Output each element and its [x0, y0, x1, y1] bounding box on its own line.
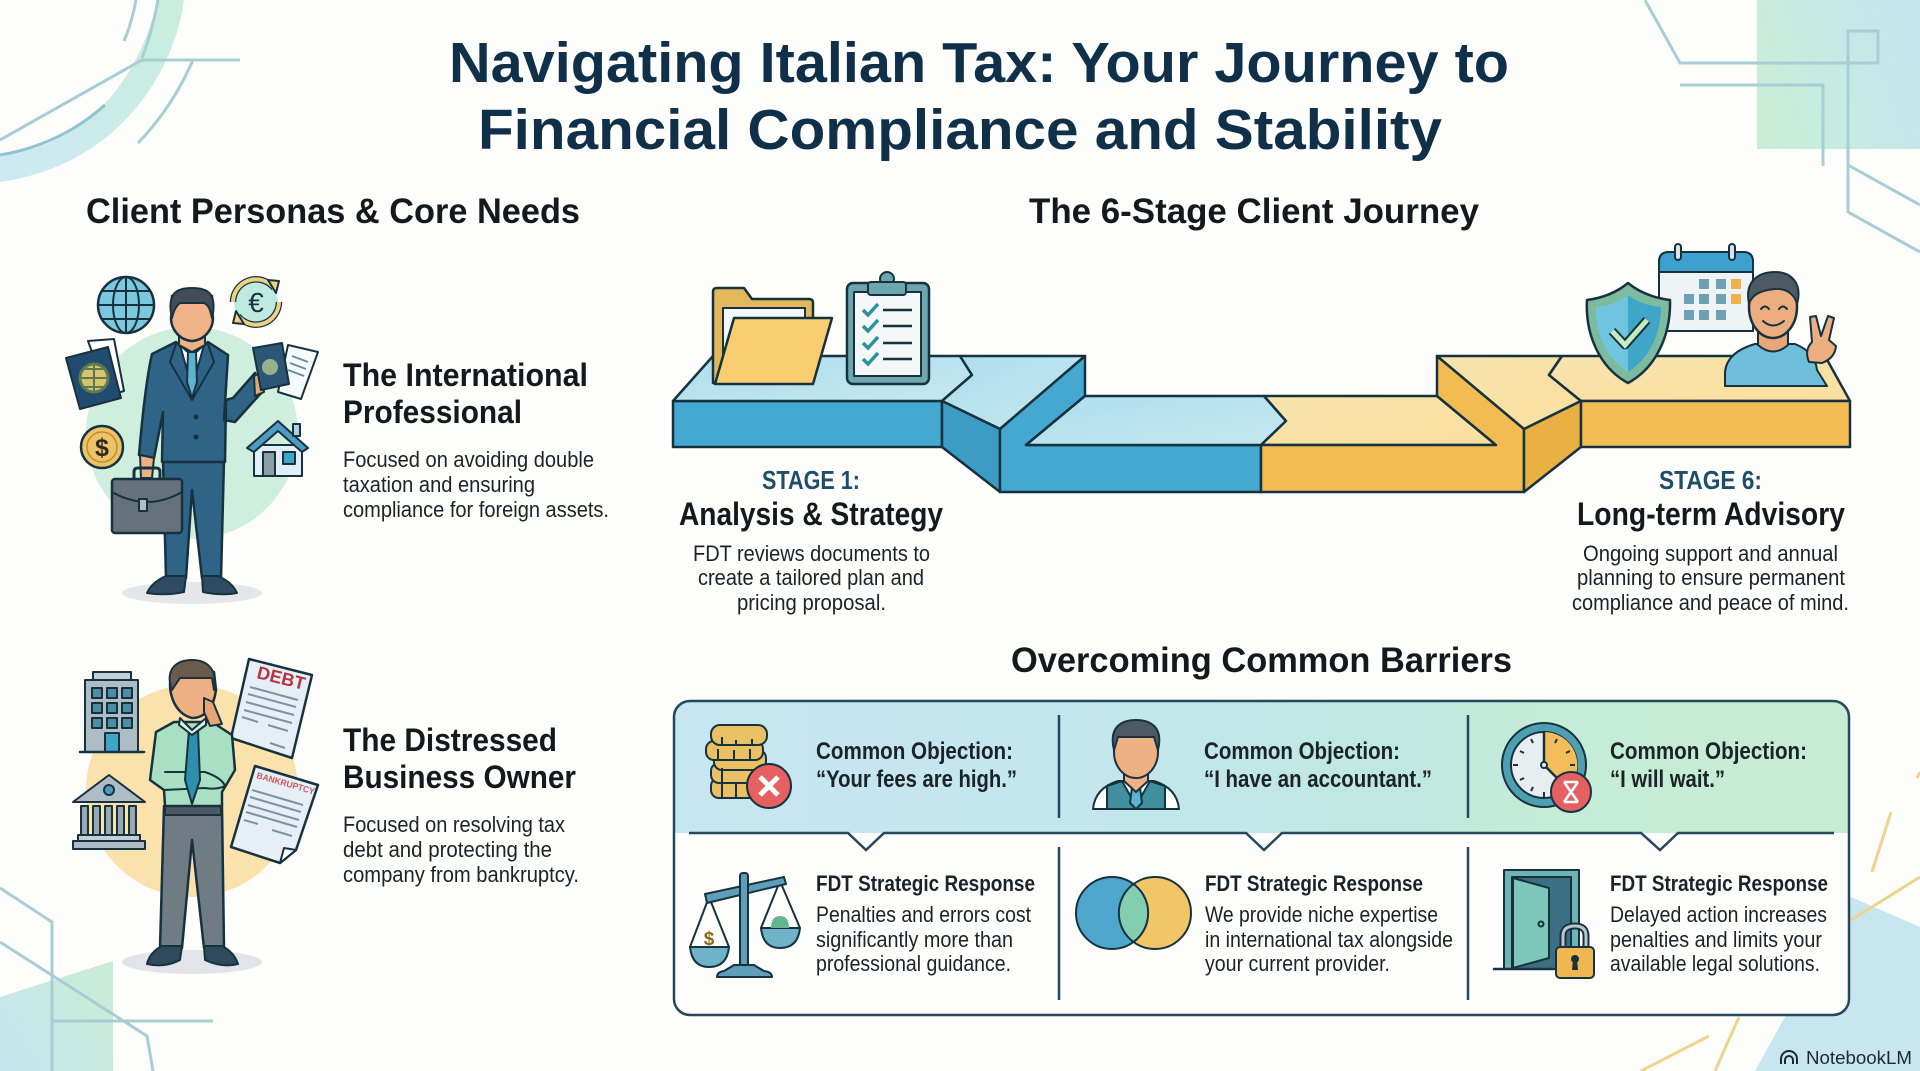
watermark: NotebookLM: NotebookLM — [1806, 1048, 1912, 1068]
objection text: “I will wait.” — [1610, 766, 1725, 793]
response text: We provide niche expertise — [1205, 902, 1438, 927]
icon: globe — [98, 277, 154, 333]
icon: happy client — [1725, 272, 1836, 386]
persona: international professional — [66, 277, 609, 604]
response text: Penalties and errors cost — [816, 902, 1031, 927]
objection text: Common Objection: — [1204, 738, 1400, 765]
objection 2 — [1093, 720, 1432, 809]
heading: client journey: The 6-Stage Client Journey — [1029, 192, 1480, 231]
stage 1 — [679, 465, 943, 615]
illustration: man with suit and icons — [66, 277, 318, 604]
document: debt — [231, 659, 312, 758]
panel: barriers — [673, 701, 1849, 1015]
stage 6: planning to ensure permanent — [1577, 565, 1845, 590]
response text: available legal solutions. — [1610, 951, 1820, 976]
objection text — [1204, 738, 1432, 793]
icon: euro exchange — [233, 279, 279, 325]
response text: penalties and limits your — [1610, 927, 1822, 952]
persona description: company from bankruptcy. — [343, 862, 579, 887]
icon: clock with timer — [1502, 723, 1591, 812]
persona: distressed business owner — [73, 659, 579, 974]
stage 1: Analysis & Strategy — [679, 496, 943, 532]
icon: bank — [73, 775, 145, 849]
objection text: “Your fees are high.” — [816, 766, 1017, 793]
icon: held passport and document — [253, 343, 318, 399]
persona description: Focused on avoiding double — [343, 447, 594, 472]
stage 6 — [1572, 465, 1849, 615]
objection text — [816, 738, 1017, 793]
stage 6: Ongoing support and annual — [1583, 541, 1838, 566]
icon: house — [247, 421, 308, 476]
icon: accountant — [1093, 720, 1179, 809]
icon: venn diagram — [1076, 877, 1191, 949]
man — [160, 806, 224, 948]
persona name — [343, 722, 576, 795]
icon: euro exchange: € — [248, 287, 264, 318]
icon: folder — [713, 288, 832, 384]
persona name: Professional — [343, 394, 522, 430]
stage 1: pricing proposal. — [737, 590, 886, 615]
persona name: The International — [343, 357, 588, 393]
objection 1 — [706, 725, 1017, 808]
persona description — [343, 447, 609, 522]
response text: professional guidance. — [816, 951, 1011, 976]
icon: calendar — [1659, 244, 1753, 331]
decoration: top-right block and lines — [1645, 0, 1920, 252]
response text — [1610, 871, 1828, 976]
stage 1: create a tailored plan and — [698, 565, 924, 590]
objection text: Common Objection: — [1610, 738, 1807, 765]
stage 1: FDT reviews documents to — [693, 541, 930, 566]
response text: FDT Strategic Response — [1205, 871, 1423, 896]
journey ribbon — [673, 244, 1850, 492]
decoration: top-left arcs — [0, 0, 240, 182]
man — [163, 460, 224, 578]
stage 1: STAGE 1: — [762, 465, 860, 495]
persona description: taxation and ensuring — [343, 472, 535, 497]
icon: checklist clipboard — [847, 272, 929, 384]
response text — [816, 871, 1035, 976]
response 1 — [690, 871, 1035, 977]
title: Financial Compliance and Stability — [478, 98, 1442, 162]
icon: balance scale — [690, 873, 800, 977]
response text — [1205, 871, 1453, 976]
heading: client personas: Client Personas & Core Needs — [86, 192, 580, 231]
icon: balance scale: $ — [704, 929, 715, 950]
objection text — [1610, 738, 1807, 793]
persona name: The Distressed — [343, 722, 557, 758]
persona description: compliance for foreign assets. — [343, 497, 609, 522]
icon: dollar coin — [81, 426, 123, 468]
heading: barriers: Overcoming Common Barriers — [1011, 641, 1512, 680]
decoration: bottom-right block and lines — [1641, 772, 1920, 1071]
briefcase — [112, 468, 182, 533]
response 3 — [1494, 870, 1828, 978]
document: debt: DEBT — [255, 662, 307, 694]
document: bankruptcy — [231, 766, 318, 863]
illustration: worried man with documents — [73, 659, 318, 974]
response text: Delayed action increases — [1610, 902, 1827, 927]
persona name — [343, 357, 588, 430]
decoration: bottom-left block and lines — [0, 888, 213, 1071]
icon: coins — [706, 725, 791, 808]
icon: dollar coin: $ — [95, 434, 109, 462]
stage 6: compliance and peace of mind. — [1572, 590, 1849, 615]
icon: passport — [66, 339, 124, 409]
objection text: Common Objection: — [816, 738, 1013, 765]
icon: office building — [80, 672, 144, 752]
stage 6: Long-term Advisory — [1577, 496, 1845, 532]
icon: door with padlock — [1494, 870, 1594, 978]
response text: your current provider. — [1205, 951, 1390, 976]
response 2 — [1076, 871, 1453, 976]
objection 3 — [1502, 723, 1807, 812]
persona description — [343, 812, 579, 887]
document: bankruptcy: BANKRUPTCY — [255, 770, 316, 796]
title: Navigating Italian Tax: Your Journey to — [449, 31, 1509, 95]
objection text: “I have an accountant.” — [1204, 766, 1432, 793]
stage 6: STAGE 6: — [1659, 465, 1762, 495]
response text: FDT Strategic Response — [816, 871, 1035, 896]
title — [449, 31, 1509, 162]
icon: shield — [1587, 283, 1670, 383]
persona description: debt and protecting the — [343, 837, 552, 862]
response text: significantly more than — [816, 927, 1013, 952]
response text: in international tax alongside — [1205, 927, 1453, 952]
persona name: Business Owner — [343, 759, 576, 795]
response text: FDT Strategic Response — [1610, 871, 1828, 896]
persona description: Focused on resolving tax — [343, 812, 565, 837]
